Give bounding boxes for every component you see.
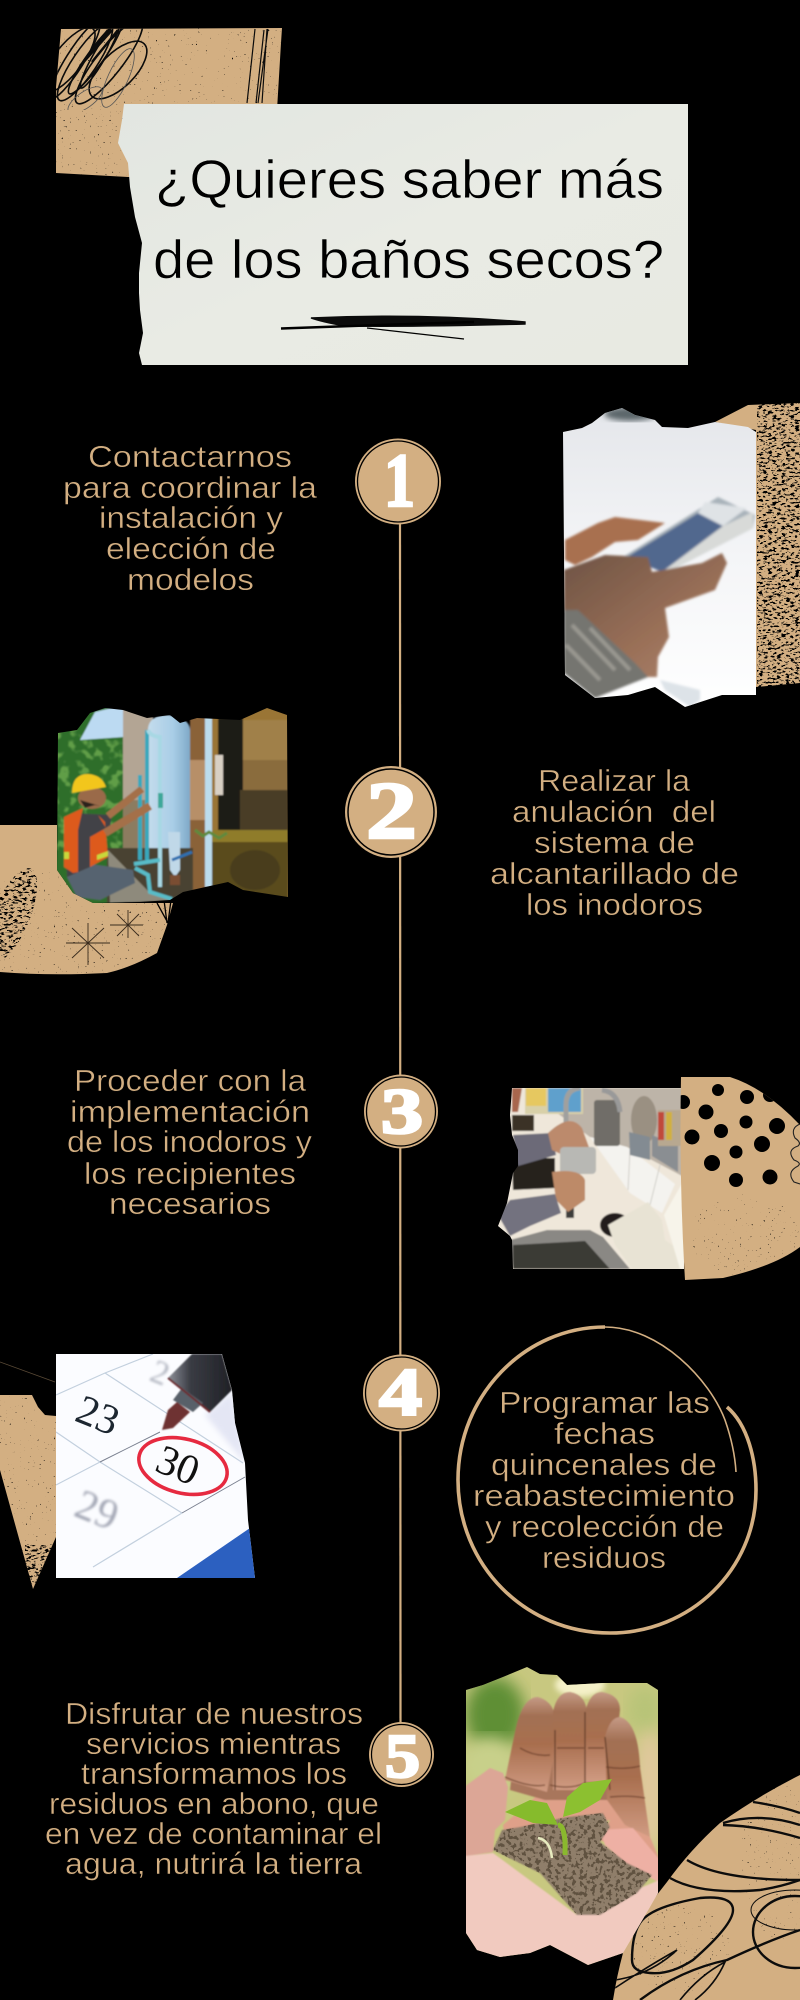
step 3 text: implementación bbox=[70, 1094, 310, 1129]
step 3 text: Proceder con la bbox=[74, 1063, 307, 1098]
step 2 text: sistema de bbox=[534, 825, 695, 860]
step 1 text: para coordinar la bbox=[63, 470, 318, 505]
step 2 text: alcantarillado de bbox=[490, 856, 739, 891]
title text bbox=[153, 150, 664, 290]
step 3 text: necesarios bbox=[109, 1186, 271, 1221]
step 5 text: transformamos los bbox=[81, 1756, 347, 1791]
step 1 text: modelos bbox=[127, 562, 254, 597]
title paper bbox=[118, 104, 688, 365]
step 4 text: quincenales de bbox=[491, 1447, 717, 1482]
number badge 3 bbox=[364, 1074, 438, 1148]
photo: calendar: 23 bbox=[70, 1387, 126, 1445]
step 1 text: instalación y bbox=[99, 500, 284, 535]
step 1 text: Contactarnos bbox=[88, 439, 292, 474]
step 5 text bbox=[45, 1696, 382, 1881]
step 1 text: elección de bbox=[106, 531, 276, 566]
step 4 tan triangle bbox=[0, 1362, 56, 1590]
step 3 text: los recipientes bbox=[84, 1156, 296, 1191]
step 4 text bbox=[473, 1385, 735, 1575]
photo: hands with seedling bbox=[466, 1667, 658, 1965]
timeline line bbox=[399, 520, 402, 1724]
star decorations bbox=[66, 910, 143, 965]
number badge 4: 4 bbox=[379, 1354, 422, 1430]
step 2 text: los inodoros bbox=[526, 887, 703, 922]
photo: calendar: 30 bbox=[150, 1437, 206, 1495]
step 2 text: Realizar la bbox=[538, 763, 691, 798]
number badge 2: 2 bbox=[366, 765, 417, 856]
number badge 3: 3 bbox=[381, 1076, 423, 1148]
step 1 tan texture bbox=[715, 403, 800, 687]
step 4 text: fechas bbox=[554, 1416, 655, 1451]
number badge 1 bbox=[355, 438, 441, 524]
title text: ¿Quieres saber más bbox=[155, 150, 664, 210]
number badge 5: 5 bbox=[385, 1723, 420, 1791]
photo: calendar: 2 bbox=[145, 1353, 175, 1394]
photo: faucet installation bbox=[495, 1085, 687, 1275]
step 5 text: en vez de contaminar el bbox=[45, 1816, 382, 1851]
step 5 text: servicios mientras bbox=[86, 1726, 341, 1761]
number badge 2 bbox=[345, 765, 437, 858]
step 2 text: anulación del bbox=[512, 794, 716, 829]
step 4 text: residuos bbox=[542, 1540, 666, 1575]
step 4 text: reabastecimiento bbox=[473, 1478, 735, 1513]
step 4 text: y recolección de bbox=[485, 1509, 724, 1544]
step 2 text bbox=[490, 763, 739, 922]
photo: calendar bbox=[56, 1353, 256, 1580]
step 5 text: Disfrutar de nuestros bbox=[65, 1696, 363, 1731]
title text: de los baños secos? bbox=[153, 230, 664, 290]
step 3 text: de los inodoros y bbox=[67, 1124, 313, 1159]
number badge 1: 1 bbox=[384, 439, 415, 523]
step 3 text bbox=[67, 1063, 313, 1221]
step 4 text: Programar las bbox=[499, 1385, 710, 1420]
step 3 tan shape with dots bbox=[676, 1077, 800, 1280]
step 2 photo tan backing bbox=[0, 825, 175, 975]
number badge 5 bbox=[369, 1722, 434, 1791]
header tan paper with scribble bbox=[56, 28, 282, 177]
title underline scribble bbox=[281, 316, 525, 339]
bottom right tan shape with scribbles bbox=[613, 1775, 800, 2000]
photo: technician at water tank bbox=[56, 705, 290, 905]
photo: hand holding phone bbox=[563, 405, 756, 710]
step 1 text bbox=[63, 439, 318, 597]
step 5 text: residuos en abono, que bbox=[49, 1786, 379, 1821]
hand-drawn ring bbox=[458, 1327, 756, 1633]
photo: calendar: 29 bbox=[69, 1482, 125, 1540]
step 5 text: agua, nutrirá la tierra bbox=[65, 1846, 363, 1881]
number badge 4 bbox=[363, 1354, 440, 1432]
